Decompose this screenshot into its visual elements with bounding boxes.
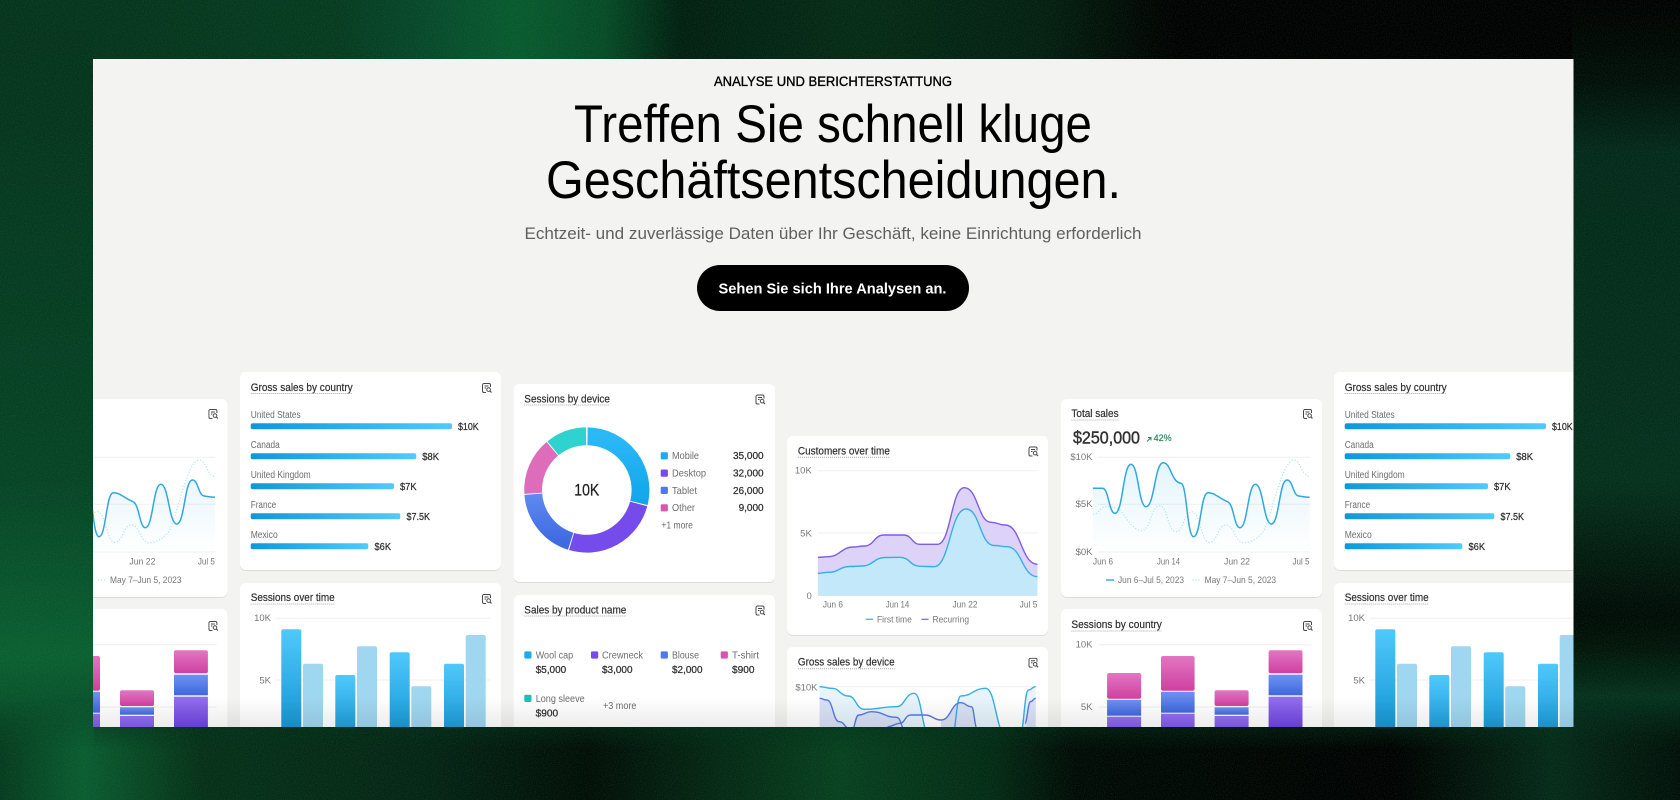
icon: report search <box>1029 447 1038 456</box>
main heading: Treffen Sie schnell kluge <box>574 95 1092 154</box>
card title: Sessions by device <box>524 393 610 405</box>
bar chart: countries: $6K <box>374 542 391 553</box>
bar chart: countries: $8K <box>422 452 439 463</box>
line chart: sales: Jun 22 <box>1224 556 1250 568</box>
panel: gross sales by device <box>787 647 1048 727</box>
panel: sales by product name <box>514 595 775 727</box>
panel: gross sales by country (repeat, cut off right): United Kingdom <box>1345 470 1405 481</box>
panel: sessions by country <box>1061 609 1322 750</box>
bar chart: countries <box>251 410 479 553</box>
legend: customers <box>866 616 968 624</box>
button: call to action <box>697 265 969 311</box>
metric: total value: $250,000 <box>1073 428 1140 448</box>
panel: gross sales by country (repeat, cut off right): $8K <box>1516 452 1533 463</box>
area chart: customers: Jun 22 <box>952 600 978 611</box>
panel: analytics section <box>93 59 1574 727</box>
area chart: customers: 0 <box>807 591 812 602</box>
legend: products: $900 <box>732 665 755 676</box>
bar chart: sessions <box>254 614 490 727</box>
line chart: sales <box>1070 452 1310 568</box>
legend: periods: May 7–Jun 5, 2023 <box>1205 575 1276 586</box>
line chart: sales: Jul 5 <box>1292 556 1310 568</box>
metric: change percent <box>1146 434 1172 442</box>
panel: gross sales by country (repeat, cut off right): Gross sales by country <box>1345 382 1447 394</box>
panel: sessions over time (repeat, cut off right): 10K <box>1348 613 1366 624</box>
bar chart: sessions: 5K <box>259 676 272 686</box>
subheading: Echtzeit- und zuverlässige Daten über Ihr Geschäft, keine Einrichtung erforderlich <box>524 224 1142 243</box>
card title: Customers over time <box>798 445 890 457</box>
line chart: sales: $0K <box>1076 547 1093 558</box>
bar chart: countries: United States <box>251 410 301 421</box>
area chart: devices: $10K <box>795 682 818 693</box>
card title: Gross sales by country <box>251 382 353 394</box>
donut chart: 10K <box>574 482 599 500</box>
panel: sessions over time (repeat, cut off right): 5K <box>1353 676 1366 686</box>
icon: report search <box>482 594 492 604</box>
legend: devices: 26,000 <box>733 486 764 497</box>
panel: gross sales by country <box>240 372 501 571</box>
card title: Total sales <box>1071 408 1119 420</box>
panel: gross sales by country (repeat, cut off right) <box>1334 372 1595 571</box>
panel: gross sales by country (repeat, cut off right): Mexico <box>1345 530 1372 541</box>
legend: devices: Tablet <box>672 486 697 497</box>
panel: sessions over time <box>240 583 501 727</box>
legend: products: Wool cap <box>536 651 574 662</box>
line chart: sales: Jun 14 <box>1157 556 1180 568</box>
legend: devices: 32,000 <box>733 468 764 480</box>
stacked bar chart: 5K <box>1081 702 1093 713</box>
legend: devices: 35,000 <box>733 451 764 462</box>
metric: change percent: 42% <box>1154 433 1172 444</box>
legend: devices <box>661 451 764 532</box>
legend: products: Blouse <box>672 651 699 662</box>
legend: products: T-shirt <box>732 651 759 662</box>
legend: products: Crewneck <box>602 651 644 662</box>
line chart: sales: $5K <box>1076 499 1093 510</box>
area chart: customers: Jun 6 <box>823 600 843 611</box>
legend: products: Long sleeve <box>536 694 585 705</box>
bar chart: countries: $10K <box>458 422 479 433</box>
panel: total sales (cut off left): May 7–Jun 5, 2023 <box>110 575 182 586</box>
area chart: customers: 5K <box>800 528 812 540</box>
panel: gross sales by country (repeat, cut off right): $7K <box>1494 482 1511 493</box>
panel: total sales <box>1061 399 1322 598</box>
icon: report search <box>1304 622 1312 630</box>
stacked bar chart: 10K <box>1076 640 1093 650</box>
panel: total sales (cut off left) <box>93 399 228 598</box>
panel: total sales (cut off left): Jun 22 <box>129 556 155 568</box>
area chart: customers <box>795 466 1038 611</box>
area chart: customers: Jun 14 <box>886 600 909 611</box>
panel: sessions over time (repeat, cut off right): Sessions over time <box>1345 592 1429 604</box>
main heading: Geschäftsentscheidungen. <box>546 151 1121 210</box>
bar chart: countries: United Kingdom <box>251 470 311 481</box>
legend: products: $900 <box>536 708 559 720</box>
bar chart: countries: France <box>251 500 277 511</box>
icon: report search <box>1029 658 1038 667</box>
donut chart <box>533 436 640 544</box>
bar chart: countries: Mexico <box>251 530 278 541</box>
line chart: sales: Jun 6 <box>1093 556 1113 568</box>
legend: products: $5,000 <box>536 665 567 676</box>
line chart: sales: $10K <box>1070 452 1093 463</box>
bar chart: countries: Canada <box>251 440 280 451</box>
panel: gross sales by country (repeat, cut off right): United States <box>1345 410 1395 421</box>
panel: total sales (cut off left): Jul 5 <box>198 556 215 568</box>
main heading <box>546 95 1121 210</box>
card title: Sales by product name <box>524 604 626 616</box>
icon: report search <box>1304 410 1312 418</box>
card title: Sessions over time <box>251 592 335 604</box>
panel: gross sales by country (repeat, cut off right): $7.5K <box>1500 512 1524 523</box>
bar chart: sessions: 10K <box>254 613 272 624</box>
eyebrow heading: ANALYSE UND BERICHTERSTATTUNG <box>714 74 952 89</box>
icon: report search <box>756 395 765 404</box>
legend: customers: First time <box>877 614 912 625</box>
panel: sessions over time (repeat, cut off right) <box>1334 583 1595 754</box>
area chart: customers: 10K <box>795 466 812 477</box>
legend: products: $2,000 <box>672 665 703 676</box>
legend: products: $3,000 <box>602 665 633 676</box>
legend: periods: Jun 6–Jul 5, 2023 <box>1118 575 1184 586</box>
legend: periods <box>1106 575 1276 586</box>
card title: Sessions by country <box>1071 619 1162 631</box>
panel: gross sales by country (repeat, cut off right): Canada <box>1345 440 1374 451</box>
bar chart: countries: $7.5K <box>406 512 430 523</box>
icon: report search <box>482 384 492 392</box>
legend: devices: 9,000 <box>739 503 764 514</box>
panel: customers over time <box>787 436 1048 636</box>
legend: products: +3 more <box>603 701 637 712</box>
icon: report search <box>756 606 765 615</box>
stacked bar chart <box>1076 640 1311 747</box>
bar chart: countries: $7K <box>400 482 417 493</box>
panel: gross sales by country (repeat, cut off right): $6K <box>1468 542 1485 553</box>
button: call to action: Sehen Sie sich Ihre Analysen an. <box>718 280 946 298</box>
panel: sessions by device <box>514 384 775 583</box>
legend: customers: Recurring <box>932 614 969 625</box>
panel: sessions by country (cut off left) <box>93 609 227 727</box>
area chart: customers: Jul 5 <box>1020 600 1038 611</box>
card title: Gross sales by device <box>798 657 895 669</box>
panel: gross sales by country (repeat, cut off right): France <box>1345 500 1371 511</box>
legend: devices: Desktop <box>672 468 706 480</box>
panel: gross sales by country (repeat, cut off right): $10K <box>1552 422 1573 433</box>
legend: products <box>524 651 759 720</box>
legend: devices: Mobile <box>672 451 699 462</box>
legend: devices: +1 more <box>661 520 693 532</box>
area chart: devices <box>796 684 1038 727</box>
legend: devices: Other <box>672 503 696 514</box>
